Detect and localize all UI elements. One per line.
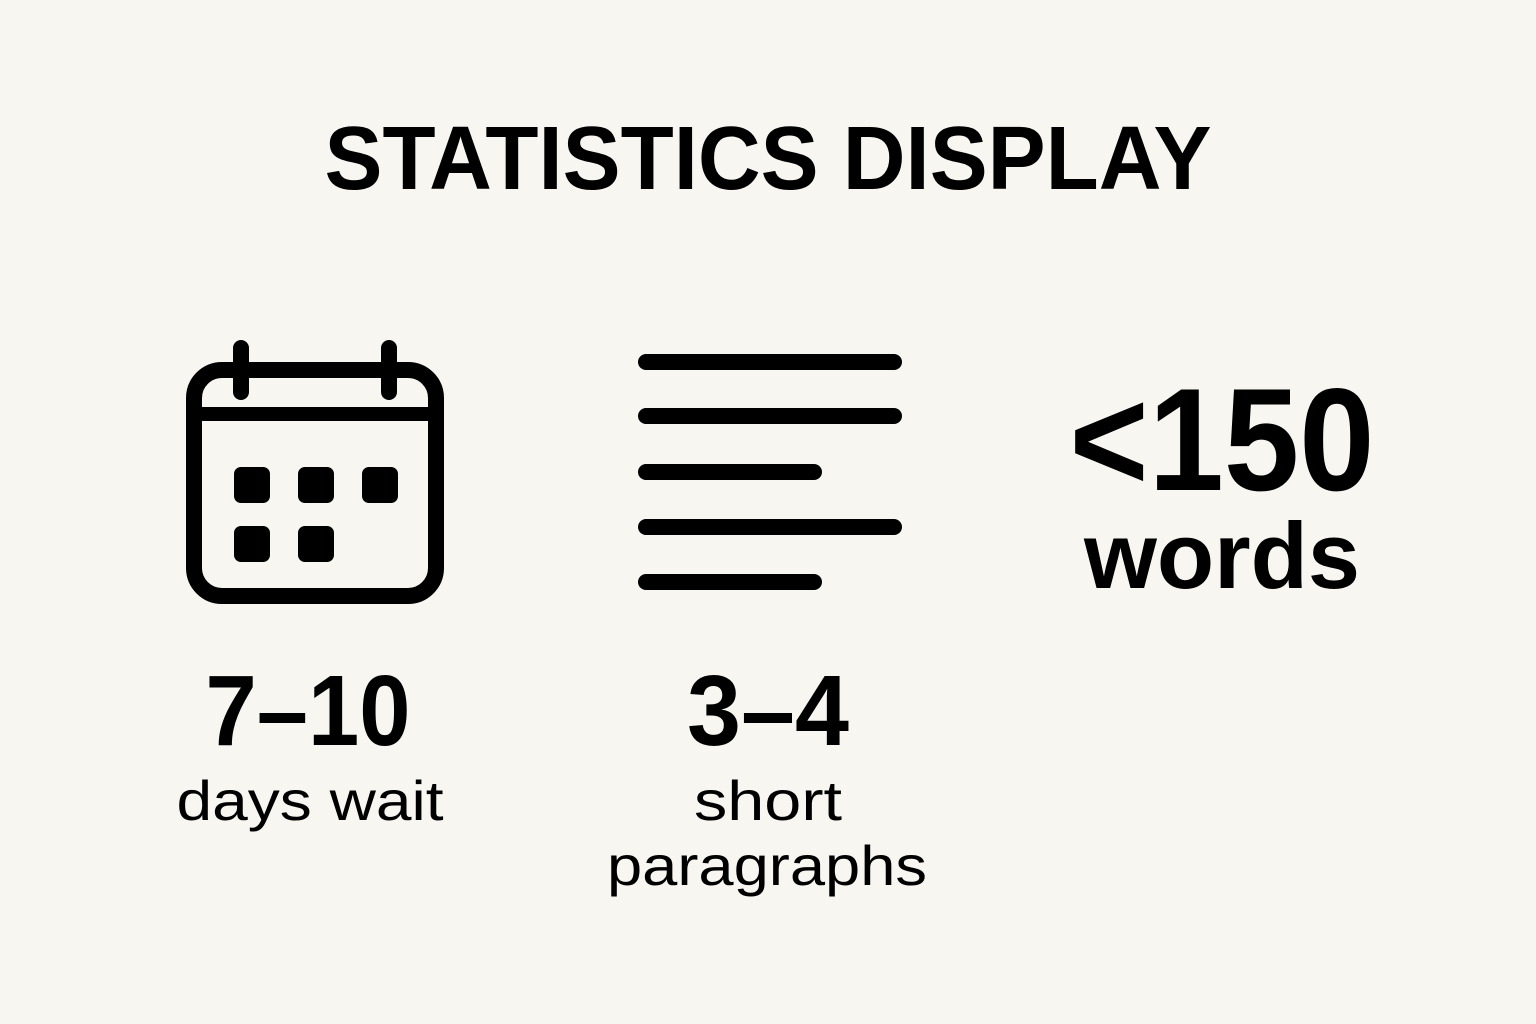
stat: 7-10 days wait: 7–10	[206, 655, 410, 767]
stat: 3-4 short paragraphs: paragraphs	[607, 834, 927, 897]
stat: 3-4 short paragraphs: 3–4	[687, 655, 849, 767]
stat: 3-4 short paragraphs	[607, 655, 927, 897]
icon: calendar	[194, 348, 436, 596]
stat: 3-4 short paragraphs: short	[694, 769, 843, 832]
title: STATISTICS DISPLAY	[324, 109, 1212, 209]
stat: under 150 words: words	[1083, 503, 1360, 608]
stat: under 150 words	[1070, 358, 1374, 608]
stat: under 150 words: <150	[1070, 358, 1374, 521]
stat: 7-10 days wait	[176, 655, 444, 832]
icon: text lines	[646, 362, 894, 582]
stat: 7-10 days wait: days wait	[176, 769, 444, 832]
